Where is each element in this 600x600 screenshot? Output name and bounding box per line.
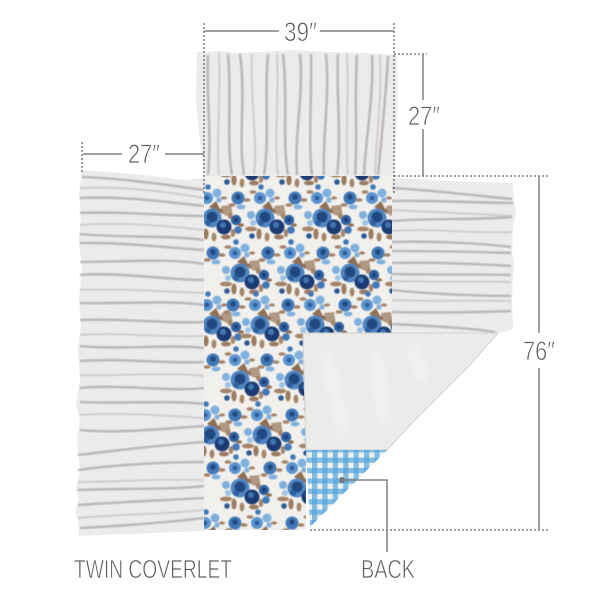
gingham back fabric [306,450,387,527]
label: twin coverlet: TWIN COVERLET [74,554,232,584]
dimension: top width 39 inches: 39″ [284,17,317,47]
panel: folded back corner [303,333,498,527]
label: back: BACK [361,554,415,584]
leader: back callout [339,477,387,552]
panel: left ruffle [75,170,204,536]
panel: floral centre [204,176,392,530]
dimension: length 76 inches: 76″ [523,336,555,366]
dimension: top ruffle drop 27 inches: 27″ [408,101,440,131]
panel: top ruffle [196,50,398,176]
dimension: left ruffle 27 inches: 27″ [128,139,160,169]
dimension: left ruffle 27 inches [82,139,204,172]
panel: right ruffle [392,178,516,333]
